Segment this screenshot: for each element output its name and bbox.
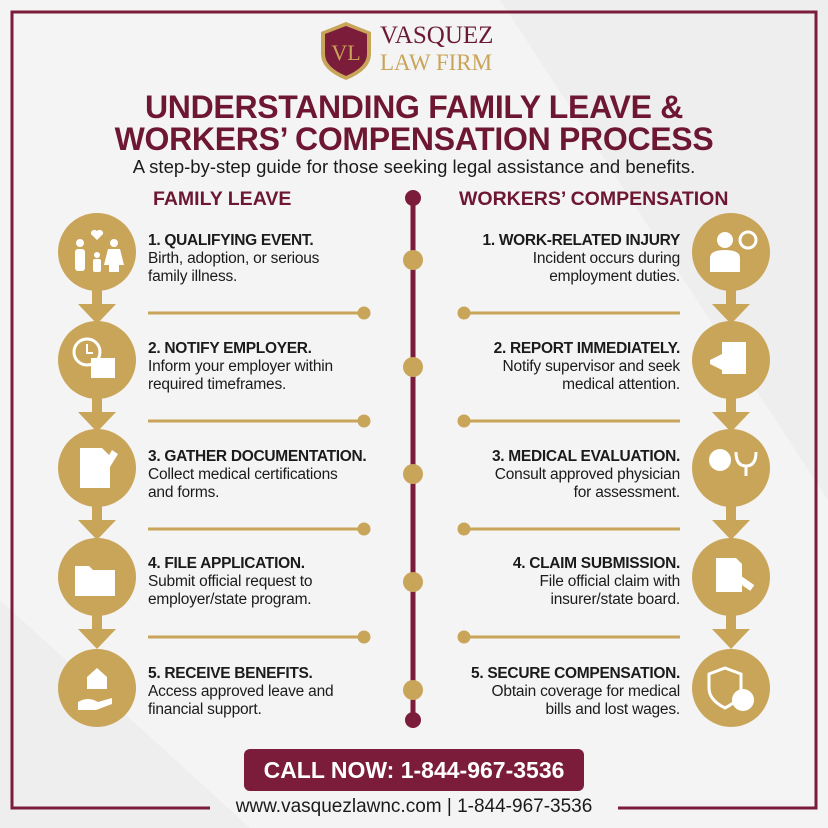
text: 5. RECEIVE BENEFITS. <box>148 665 313 682</box>
step texts family leave: family illness. <box>148 268 237 285</box>
text: Obtain coverage for medical <box>492 683 680 700</box>
text: employer/state program. <box>148 591 311 608</box>
call button: CALL NOW: 1-844-967-3536 <box>264 757 564 783</box>
claim doc gavel <box>716 558 742 592</box>
text: for assessment. <box>574 484 680 501</box>
heading: workers compensation: WORKERS’ COMPENSATION <box>459 188 728 210</box>
heading: family leave: FAMILY LEAVE <box>153 188 291 210</box>
shield dollar <box>709 668 741 708</box>
text: 5. SECURE COMPENSATION. <box>471 665 680 682</box>
folder <box>75 566 115 596</box>
step texts workers comp: employment duties. <box>549 268 680 285</box>
step texts workers comp <box>482 232 680 285</box>
medical <box>709 449 731 471</box>
text: and forms. <box>148 484 219 501</box>
logo <box>321 22 493 80</box>
timeline <box>403 190 423 728</box>
text: required timeframes. <box>148 376 286 393</box>
clipboard megaphone <box>722 342 746 374</box>
text: financial support. <box>148 701 262 718</box>
text: Inform your employer within <box>148 358 333 375</box>
logo: LAW FIRM <box>380 50 492 75</box>
document pen <box>80 448 110 488</box>
logo: VASQUEZ <box>380 22 493 49</box>
text: insurer/state board. <box>550 591 680 608</box>
text: 2. NOTIFY EMPLOYER. <box>148 340 312 357</box>
text: 3. MEDICAL EVALUATION. <box>492 448 680 465</box>
title: UNDERSTANDING FAMILY LEAVE & <box>145 89 683 125</box>
step texts workers comp: 1. WORK-RELATED INJURY <box>482 232 680 249</box>
family icon <box>75 230 124 272</box>
title: WORKERS’ COMPENSATION PROCESS <box>115 121 713 157</box>
text: 2. REPORT IMMEDIATELY. <box>494 340 680 357</box>
text: Submit official request to <box>148 573 312 590</box>
injured worker <box>717 232 733 248</box>
clock calendar <box>74 339 100 365</box>
text: Collect medical certifications <box>148 466 338 483</box>
text: Notify supervisor and seek <box>503 358 680 375</box>
logo: VL <box>331 40 361 65</box>
text: Consult approved physician <box>495 466 680 483</box>
step texts family leave <box>148 232 319 285</box>
subtitle: A step-by-step guide for those seeking legal assistance and benefits. <box>133 156 695 177</box>
step texts family leave: Birth, adoption, or serious <box>148 250 319 267</box>
text: 4. FILE APPLICATION. <box>148 555 305 572</box>
title <box>114 89 713 157</box>
text: 3. GATHER DOCUMENTATION. <box>148 448 366 465</box>
call button <box>244 749 584 791</box>
house hand <box>87 668 107 689</box>
text: medical attention. <box>562 376 680 393</box>
step texts family leave: 1. QUALIFYING EVENT. <box>148 232 313 249</box>
text: File official claim with <box>540 573 680 590</box>
arrows <box>78 290 116 324</box>
text: Access approved leave and <box>148 683 333 700</box>
footer: www.vasquezlawnc.com | 1-844-967-3536 <box>236 796 592 817</box>
text: bills and lost wages. <box>545 701 680 718</box>
step texts workers comp: Incident occurs during <box>533 250 680 267</box>
text: 4. CLAIM SUBMISSION. <box>513 555 680 572</box>
